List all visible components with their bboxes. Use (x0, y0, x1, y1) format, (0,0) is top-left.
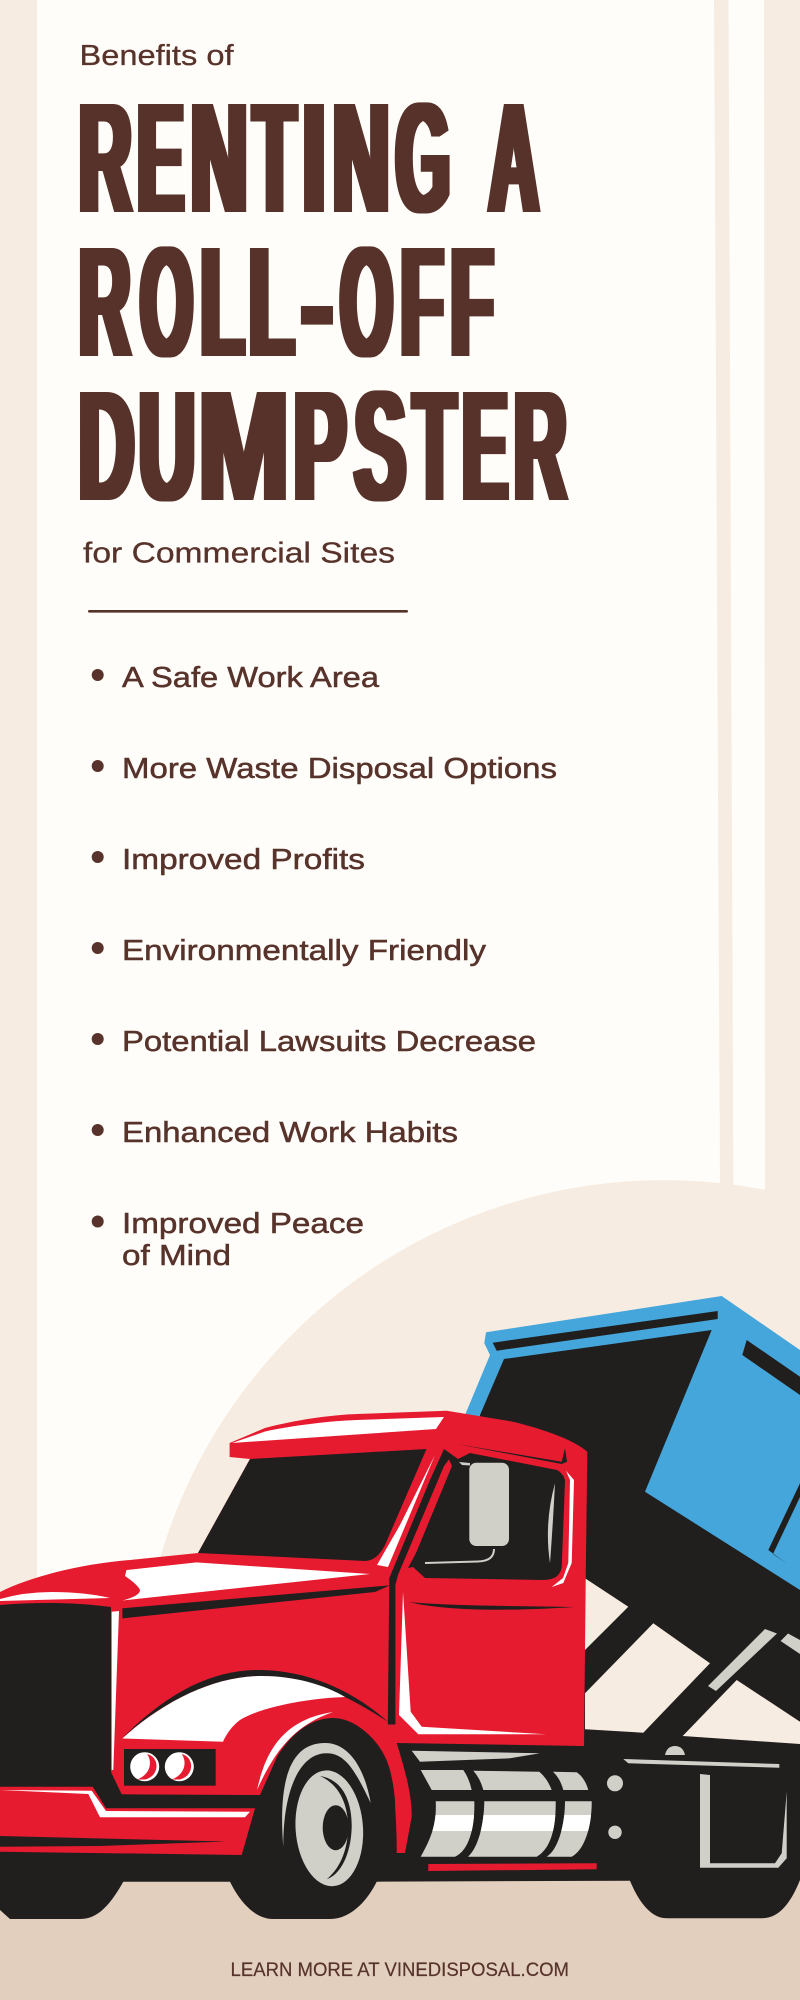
main heading: A (489, 71, 538, 246)
hood crease (122, 1585, 390, 1618)
lift arm highlights (708, 1629, 800, 1691)
intro line: Benefits of (80, 40, 235, 72)
main heading: S (354, 359, 406, 534)
door crease (409, 1602, 574, 1610)
windscreen pillar highlight (377, 1455, 435, 1567)
item 7 (92, 1208, 364, 1272)
item 7: Improved Peace (122, 1208, 364, 1240)
main heading: P (294, 359, 346, 534)
hood highlights (0, 1562, 370, 1601)
divider (88, 610, 408, 613)
grille edge highlight (112, 1611, 119, 1770)
infographic: R (514, 359, 566, 534)
dumpster (465, 1296, 800, 1592)
main heading: F (451, 215, 493, 390)
main heading: E (462, 359, 508, 534)
main heading: R (79, 215, 130, 390)
main heading: N (333, 71, 390, 246)
main heading: - (301, 215, 333, 390)
main heading: O (140, 215, 193, 390)
main heading: T (414, 359, 456, 534)
item 2: More Waste Disposal Options (122, 753, 557, 785)
item 7: of Mind (122, 1240, 231, 1272)
item 4: Environmentally Friendly (122, 935, 487, 967)
truck body and chassis silhouette (0, 1330, 800, 1919)
title block (79, 40, 566, 570)
main heading (79, 71, 566, 534)
main heading: R (79, 71, 131, 246)
item 5: Potential Lawsuits Decrease (122, 1026, 536, 1058)
bumper (0, 1787, 255, 1855)
main heading: G (396, 71, 450, 246)
headlights (124, 1749, 216, 1786)
main heading: M (198, 359, 289, 534)
main heading: F (401, 215, 443, 390)
main heading: I (302, 71, 326, 246)
main heading: L (249, 215, 294, 390)
window edge highlight (552, 1471, 574, 1587)
item 3: Improved Profits (122, 844, 365, 876)
main heading: L (201, 215, 244, 390)
main heading: O (340, 215, 393, 390)
door pillar line (388, 1449, 450, 1724)
main heading: E (137, 71, 184, 246)
front wheel (282, 1743, 371, 1889)
red cab (0, 1411, 587, 1853)
benefits list (92, 662, 557, 1272)
item 6: Enhanced Work Habits (122, 1117, 458, 1149)
gaps under dumpster (585, 1578, 800, 1744)
main heading: N (191, 71, 248, 246)
main heading: D (79, 359, 134, 534)
fuel tank (412, 1751, 595, 1857)
windscreen (198, 1449, 426, 1561)
subheading: for Commercial Sites (83, 538, 395, 570)
main heading: U (139, 359, 195, 534)
chassis details (607, 1746, 787, 1868)
main heading: T (254, 71, 296, 246)
red step (428, 1863, 597, 1871)
visor highlight (232, 1417, 444, 1443)
door highlight (399, 1592, 546, 1734)
item 1: A Safe Work Area (122, 662, 380, 694)
roll-off truck illustration (0, 1296, 800, 1919)
side window (408, 1449, 565, 1580)
fender (122, 1670, 388, 1790)
window top trim (457, 1444, 567, 1464)
side mirror (425, 1462, 555, 1563)
footer call to action: LEARN MORE AT VINEDISPOSAL.COM (230, 1959, 569, 1981)
